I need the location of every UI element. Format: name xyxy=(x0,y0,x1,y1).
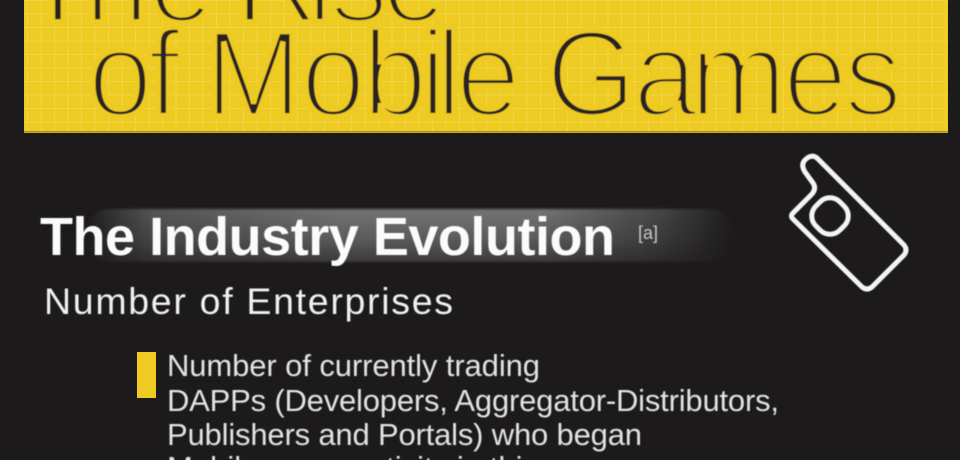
footnote marker: [a] xyxy=(638,223,658,243)
title text: of Mobile Games xyxy=(88,6,902,143)
icon: mobile phone xyxy=(792,156,906,289)
heading: the industry evolution: The Industry Evolution xyxy=(40,207,615,267)
legend description text: Number of currently trading xyxy=(167,348,540,383)
title banner xyxy=(22,0,948,143)
legend description text: DAPPs (Developers, Aggregator-Distributors, xyxy=(167,383,779,418)
legend marker: yellow bar xyxy=(137,352,156,398)
subheading: number of enterprises: Number of Enterprises xyxy=(44,280,453,322)
legend description text xyxy=(167,348,779,460)
legend description text: Publishers and Portals) who began xyxy=(167,417,642,452)
